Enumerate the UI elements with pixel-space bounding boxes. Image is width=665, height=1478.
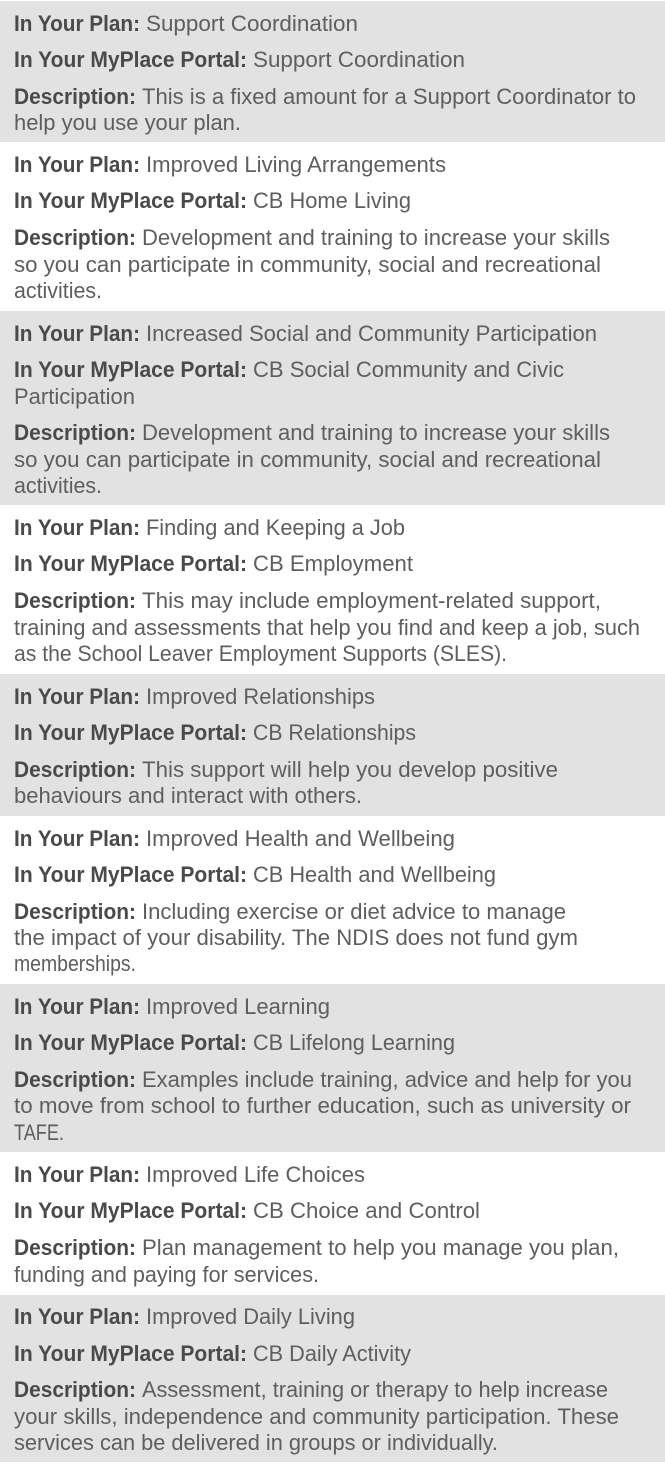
panel: Improved Life Choices: Description: [14, 1235, 136, 1260]
panel: Improved Relationships: In Your MyPlace Portal: [14, 720, 247, 745]
panel: Improved Living Arrangements: activities. [14, 278, 102, 303]
panel: Improved Living Arrangements: In Your Plan: [14, 152, 140, 177]
panel: Improved Learning: In Your Plan: [14, 994, 140, 1019]
panel: Improved Learning: Examples include training, advice and help for you [142, 1067, 632, 1092]
panel: Increased Social and Community Participation [0, 311, 665, 505]
panel: Support Coordination: In Your MyPlace Portal: [14, 47, 247, 72]
panel: Improved Learning: TAFE. [14, 1120, 64, 1145]
panel: Support Coordination [0, 1, 665, 142]
panel: Finding and Keeping a Job: In Your MyPlace Portal: [14, 551, 247, 576]
panel: Finding and Keeping a Job: CB Employment [253, 551, 413, 576]
panel: Improved Relationships: behaviours and interact with others. [14, 783, 362, 808]
panel: Finding and Keeping a Job: This may include employment-related support, [142, 588, 601, 613]
panel: Increased Social and Community Participation: CB Social Community and Civic [253, 357, 564, 382]
panel: Improved Daily Living: Assessment, training or therapy to help increase [142, 1377, 608, 1402]
panel: Improved Learning: Improved Learning [146, 994, 330, 1019]
panel: Support Coordination: This is a fixed amount for a Support Coordinator to [142, 84, 636, 109]
panel: Improved Relationships [0, 674, 665, 816]
panel: Improved Daily Living: Improved Daily Living [146, 1304, 355, 1329]
panel: Improved Relationships: This support will help you develop positive [142, 757, 558, 782]
panel: Improved Living Arrangements [0, 142, 665, 311]
panel: Increased Social and Community Participation: Participation [14, 384, 135, 409]
panel: Improved Life Choices: In Your MyPlace Portal: [14, 1198, 247, 1223]
panel: Improved Health and Wellbeing: the impact of your disability. The NDIS does not fund gym [14, 925, 578, 950]
panel: Improved Living Arrangements: In Your MyPlace Portal: [14, 188, 247, 213]
panel: Finding and Keeping a Job: as the School Leaver Employment Supports (SLES). [14, 641, 507, 666]
panel: Improved Health and Wellbeing: Including exercise or diet advice to manage [142, 899, 566, 924]
panel: Finding and Keeping a Job [0, 505, 665, 674]
panel: Improved Life Choices: funding and paying for services. [14, 1262, 319, 1287]
panel: Improved Daily Living: Description: [14, 1377, 136, 1402]
panel: Increased Social and Community Participation: so you can participate in community, social and recreational [14, 447, 601, 472]
panel: Improved Living Arrangements: Description: [14, 225, 136, 250]
panel: Improved Relationships: CB Relationships [253, 720, 416, 745]
panel: Increased Social and Community Participation: activities. [14, 473, 102, 498]
panel: Improved Daily Living: CB Daily Activity [253, 1341, 411, 1366]
panel: Increased Social and Community Participation: In Your MyPlace Portal: [14, 357, 247, 382]
panel: Improved Learning: to move from school to further education, such as university or [14, 1093, 631, 1118]
panel: Increased Social and Community Participation: Development and training to increase your skills [142, 420, 610, 445]
panel: Improved Daily Living: In Your MyPlace Portal: [14, 1341, 247, 1366]
panel: Improved Learning: In Your MyPlace Portal: [14, 1030, 247, 1055]
panel: Improved Health and Wellbeing: In Your Plan: [14, 826, 140, 851]
panel: Improved Learning [0, 984, 665, 1152]
panel: Support Coordination: Description: [14, 84, 136, 109]
panel: Improved Life Choices: Improved Life Choices [146, 1162, 365, 1187]
panel: Improved Daily Living: services can be delivered in groups or individually. [14, 1430, 498, 1455]
panel: Improved Health and Wellbeing: Improved Health and Wellbeing [146, 826, 455, 851]
panel: Improved Living Arrangements: Development and training to increase your skills [142, 225, 610, 250]
panel: Improved Health and Wellbeing: Description: [14, 899, 136, 924]
panel: Improved Health and Wellbeing: In Your MyPlace Portal: [14, 862, 247, 887]
panel: Improved Life Choices: In Your Plan: [14, 1162, 140, 1187]
panel: Support Coordination: help you use your plan. [14, 110, 241, 135]
panel: Support Coordination: Support Coordination [253, 47, 465, 72]
panel: Finding and Keeping a Job: Description: [14, 588, 136, 613]
panel: Support Coordination: In Your Plan: [14, 11, 140, 36]
panel: Improved Learning: CB Lifelong Learning [253, 1030, 455, 1055]
panel: Improved Learning: Description: [14, 1067, 136, 1092]
panel: Improved Living Arrangements: Improved Living Arrangements [146, 152, 446, 177]
panel: Improved Living Arrangements: so you can participate in community, social and recreational [14, 252, 601, 277]
panel: Improved Relationships: Description: [14, 757, 136, 782]
panel: Improved Living Arrangements: CB Home Living [253, 188, 411, 213]
panel: Support Coordination: Support Coordination [146, 11, 358, 36]
panel: Improved Health and Wellbeing [0, 816, 665, 984]
panel: Improved Health and Wellbeing: CB Health and Wellbeing [253, 862, 496, 887]
panel: Finding and Keeping a Job: training and assessments that help you find and keep a job, such [14, 615, 640, 640]
panel: Increased Social and Community Participation: Description: [14, 420, 136, 445]
panel: Improved Relationships: Improved Relationships [146, 684, 375, 709]
panel: Improved Life Choices: Plan management to help you manage you plan, [142, 1235, 619, 1260]
panel: Increased Social and Community Participation: In Your Plan: [14, 321, 140, 346]
panel: Improved Life Choices [0, 1152, 665, 1295]
panel: Finding and Keeping a Job: Finding and Keeping a Job [146, 515, 405, 540]
panel: Improved Daily Living: In Your Plan: [14, 1304, 140, 1329]
panel: Increased Social and Community Participation: Increased Social and Community Participation [146, 321, 597, 346]
panel: Improved Daily Living [0, 1295, 665, 1462]
panel: Improved Life Choices: CB Choice and Control [253, 1198, 480, 1223]
panel: Improved Daily Living: your skills, independence and community participation. These [14, 1404, 619, 1429]
panel: Improved Relationships: In Your Plan: [14, 684, 140, 709]
panel: Improved Health and Wellbeing: memberships. [14, 951, 136, 976]
panel: Finding and Keeping a Job: In Your Plan: [14, 515, 140, 540]
